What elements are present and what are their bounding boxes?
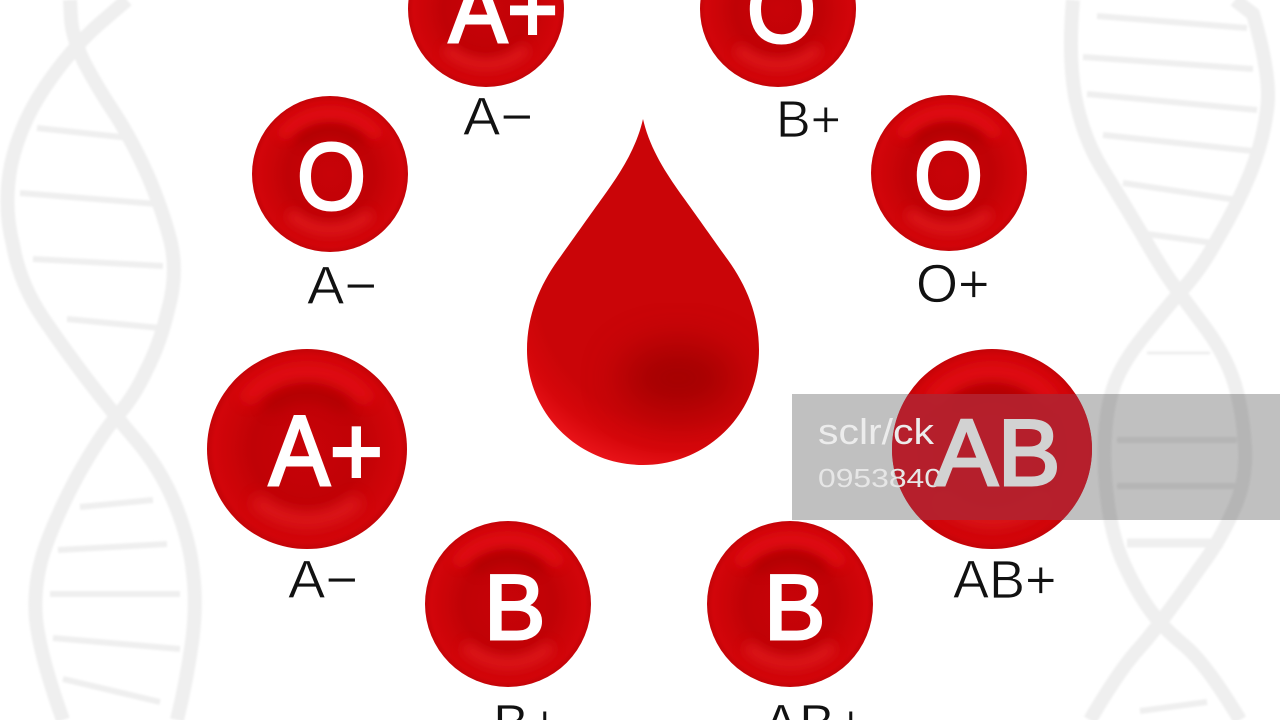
label: A- top: A− <box>463 87 533 147</box>
watermark band: 0953840 <box>818 463 942 493</box>
AB letters on cell: AB <box>935 400 1060 505</box>
blood cell: top left A+ <box>408 0 564 87</box>
blood cell: left O <box>252 96 408 252</box>
right DNA helix <box>1071 0 1268 720</box>
blood cell: bottom right B: B <box>764 557 825 659</box>
label: A- left: A− <box>307 256 377 316</box>
label: O+: O+ <box>916 254 990 314</box>
label: A- lower: A− <box>288 550 358 610</box>
blood cell: bottom right B <box>707 521 873 687</box>
watermark band: sclr/ck <box>818 411 935 452</box>
blood cell: bottom left B: B <box>484 557 545 659</box>
left DNA helix <box>7 0 195 720</box>
blood cell: right O: O <box>914 123 983 229</box>
blood cell: large A+: A+ <box>269 395 383 506</box>
blood cell: right O <box>871 95 1027 251</box>
watermark band <box>792 394 1280 520</box>
label: B+ top: B+ <box>776 91 841 149</box>
blood cell: left O: O <box>297 124 366 230</box>
blood cell: large A+ <box>207 349 407 549</box>
blood cell: bottom left B <box>425 521 591 687</box>
blood cell: top right O <box>700 0 856 87</box>
central blood drop <box>527 119 759 465</box>
label: AB+: AB+ <box>953 550 1057 610</box>
blood cell: large AB <box>892 349 1092 549</box>
